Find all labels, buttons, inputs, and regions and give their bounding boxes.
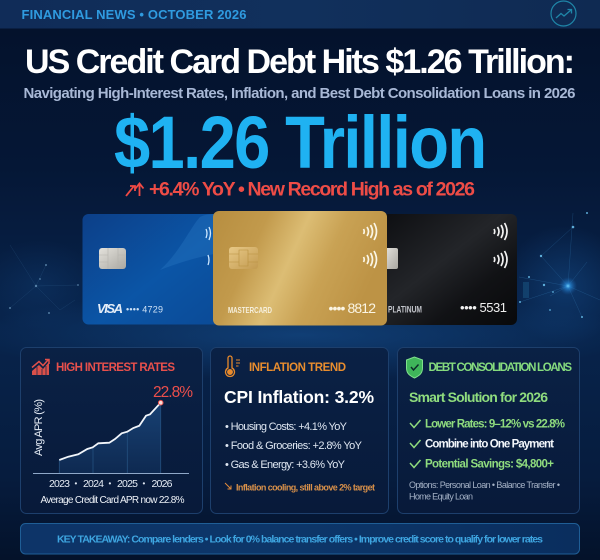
line chart: 2024 [83, 478, 104, 490]
benefit list: Lower Rates: 9–12% vs 22.8% [425, 418, 565, 430]
line chart: 2023 [49, 478, 70, 490]
icon: trend circle [551, 1, 576, 26]
icon: contactless [494, 223, 507, 268]
card: blue visa: VISA [97, 301, 123, 316]
panel heading: INFLATION TREND [249, 362, 346, 374]
loan options [409, 480, 560, 502]
solution headline: Smart Solution for 2026 [409, 389, 548, 405]
panel: debt consolidation loans [398, 348, 580, 514]
icon: red chart [32, 360, 49, 375]
card: gold mastercard [213, 211, 387, 326]
loan options: Options: Personal Loan • Balance Transfer • [409, 480, 560, 490]
panel: inflation trend [210, 348, 388, 514]
panel heading: DEBT CONSOLIDATION LOANS [428, 362, 572, 374]
card: blue visa: •••• 4729 [126, 304, 163, 314]
line chart: • [74, 479, 78, 488]
icon: green shield [406, 357, 422, 378]
line chart: • [108, 479, 112, 488]
big number: $1.26 Trillion [114, 101, 487, 184]
inflation list [225, 421, 363, 471]
panel: high interest rates [20, 348, 202, 514]
line chart: 2025 [117, 478, 138, 490]
inflation list: • Gas & Energy: +3.6% YoY [225, 459, 346, 471]
loan options: Home Equity Loan [409, 492, 473, 502]
line chart [33, 384, 193, 490]
icon: thermometer [226, 356, 240, 377]
benefit list: Potential Savings: $4,800+ [425, 458, 554, 470]
icon: red up arrow [126, 184, 144, 196]
inflation list: • Food & Groceries: +2.8% YoY [225, 440, 363, 452]
panel heading: HIGH INTEREST RATES [56, 362, 175, 374]
key takeaway bar: KEY TAKEAWAY: Compare lenders • Look for 0% balance transfer offers • Improve credit score to qualify for lower rates [57, 534, 543, 546]
card: black platinum [375, 214, 517, 325]
inflation note: Inflation cooling, still above 2% target [236, 482, 375, 492]
benefit list: Combine into One Payment [425, 438, 554, 450]
chart caption: Average Credit Card APR now 22.8% [40, 495, 185, 506]
line chart: 2026 [152, 478, 173, 490]
inflation list: • Housing Costs: +4.1% YoY [225, 421, 348, 433]
card: black platinum: •••• 5531 [460, 300, 507, 315]
network: left [10, 245, 78, 310]
line chart: • [142, 479, 146, 488]
subtitle: Navigating High-Interest Rates, Inflation, and Best Debt Consolidation Loans in 2026 [24, 85, 576, 102]
top header bar [0, 0, 600, 28]
line chart: 22.8% [153, 384, 193, 401]
title: US Credit Card Debt Hits $1.26 Trillion: [25, 43, 575, 81]
key takeaway bar [20, 524, 580, 554]
line chart: Avg APR (%) [33, 399, 45, 456]
growth line: +6.4% YoY • New Record High as of 2026 [149, 178, 475, 200]
card: blue visa [82, 214, 225, 324]
CPI headline: CPI Inflation: 3.2% [224, 387, 374, 407]
network: right [519, 213, 600, 317]
header label: FINANCIAL NEWS • OCTOBER 2026 [22, 7, 246, 22]
card: gold mastercard: MASTERCARD [228, 305, 272, 315]
icon: contactless [364, 223, 376, 268]
benefit list [410, 418, 565, 470]
card: gold mastercard: •••• 8812 [328, 300, 376, 316]
card: black platinum: PLATINUM [388, 304, 422, 314]
